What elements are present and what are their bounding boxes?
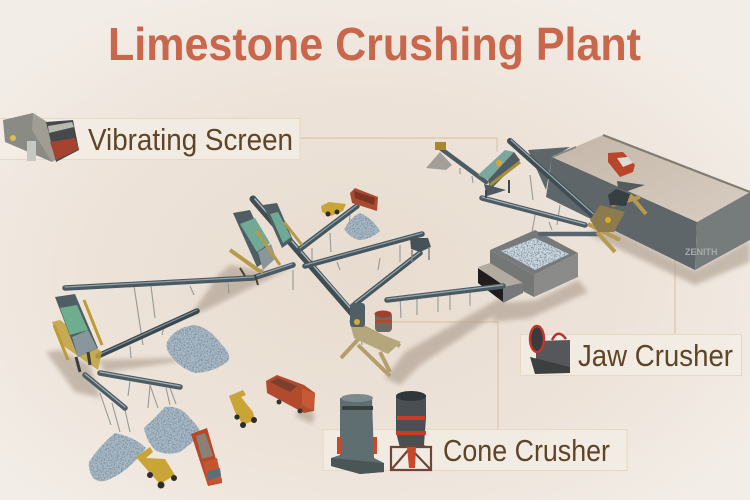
conveyor: truck side [300,205,357,249]
icon: vibrating screen [3,113,79,162]
bin rim [490,230,578,275]
pile: upper [344,213,380,240]
hopper top [478,263,523,287]
small screen unit [410,238,431,262]
pile: middle [144,407,201,454]
label text: Jaw Crusher [578,338,733,373]
truck: bottom [191,428,222,486]
conveyors [65,140,597,408]
ground shadows [46,222,750,424]
aggregate bin and hopper [478,230,578,303]
loader: centre [229,390,257,428]
watermark: ZENITH [685,247,718,257]
icon: cone crusher grey [331,394,384,474]
platform right face [695,192,750,270]
title: Limestone Crushing Plant [108,18,641,70]
crushed stone [501,238,569,270]
conveyor: cone crusher to screen [355,252,420,304]
building: raw material platform [528,135,750,270]
conveyor: left pile B [100,372,180,387]
dump hatch [617,181,645,191]
feed ramp [528,147,570,190]
label text: Cone Crusher [443,433,610,468]
label: cone crusher [323,391,627,474]
conveyor: main central incline [253,199,360,322]
label: jaw crusher [520,326,742,376]
label text: Vibrating Screen [88,122,293,157]
loader: top [321,202,346,216]
pile: centre [167,325,229,373]
hopper opening [478,268,503,302]
conveyor: to top screen [440,148,486,182]
bin outer walls [490,250,534,297]
wheel loaders [136,202,346,488]
vibrating screens: centre [230,203,302,285]
conveyor: right side pile [305,233,422,266]
cone crusher: plant [341,303,401,376]
platform top [552,135,750,222]
label: vibrating screen [0,113,300,162]
conveyor: under screen [482,197,585,225]
conveyor: left pile C [85,374,125,408]
conveyor: long transfer [65,264,293,288]
conveyor: to bin [540,232,597,236]
vibrating screen: lower left [52,294,102,372]
hopper side [503,283,523,303]
leader lines [300,138,675,429]
conveyor: bin feed [387,285,503,300]
platform front face [546,157,697,270]
icon: jaw crusher [530,326,570,374]
truck on platform [608,152,635,177]
stone piles [89,213,380,481]
conveyor: left pile A [98,310,197,356]
dump trucks [191,188,378,486]
pile: small feed [426,152,452,170]
truck: top centre [350,188,378,211]
conveyor supports [100,168,560,432]
icon: cone crusher red frame [391,391,431,470]
pile: lower [89,433,146,481]
vibrating screen: top right [435,142,520,198]
jaw crusher: plant [588,189,646,252]
loader: bottom [136,447,177,488]
truck: centre [266,375,315,414]
conveyor: top right incline [510,140,597,218]
